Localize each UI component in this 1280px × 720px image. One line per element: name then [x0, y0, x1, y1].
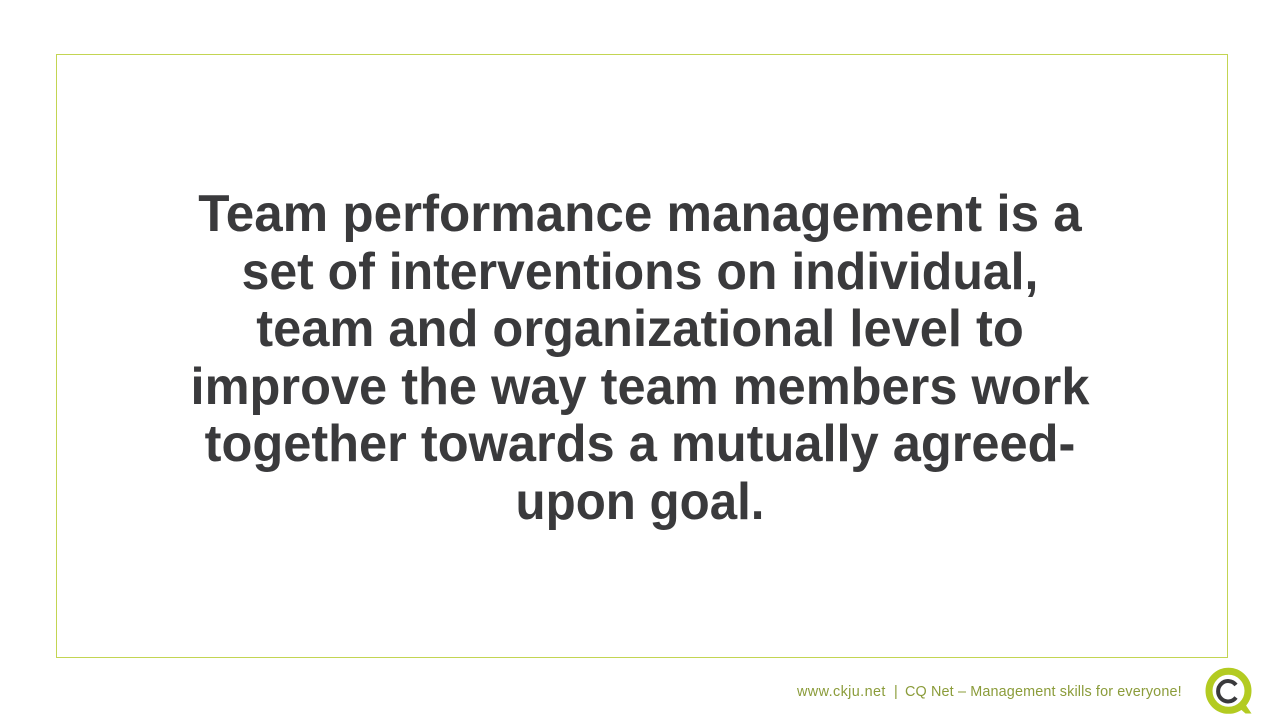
icon: CQ logo — [1206, 668, 1252, 714]
main statement text: set of interventions on individual, — [242, 243, 1038, 301]
main statement text: upon goal. — [516, 473, 764, 531]
main statement text: improve the way team members work — [191, 358, 1089, 416]
footer tagline: | — [894, 684, 898, 700]
frame panel — [56, 54, 1228, 658]
main statement text: team and organizational level to — [256, 300, 1024, 358]
main statement text: Team performance management is a — [198, 185, 1082, 243]
main statement text — [191, 185, 1090, 531]
main statement text: together towards a mutually agreed- — [205, 415, 1075, 473]
footer tagline: CQ Net – Management skills for everyone! — [905, 684, 1182, 700]
footer tagline: www.ckju.net — [797, 684, 886, 700]
